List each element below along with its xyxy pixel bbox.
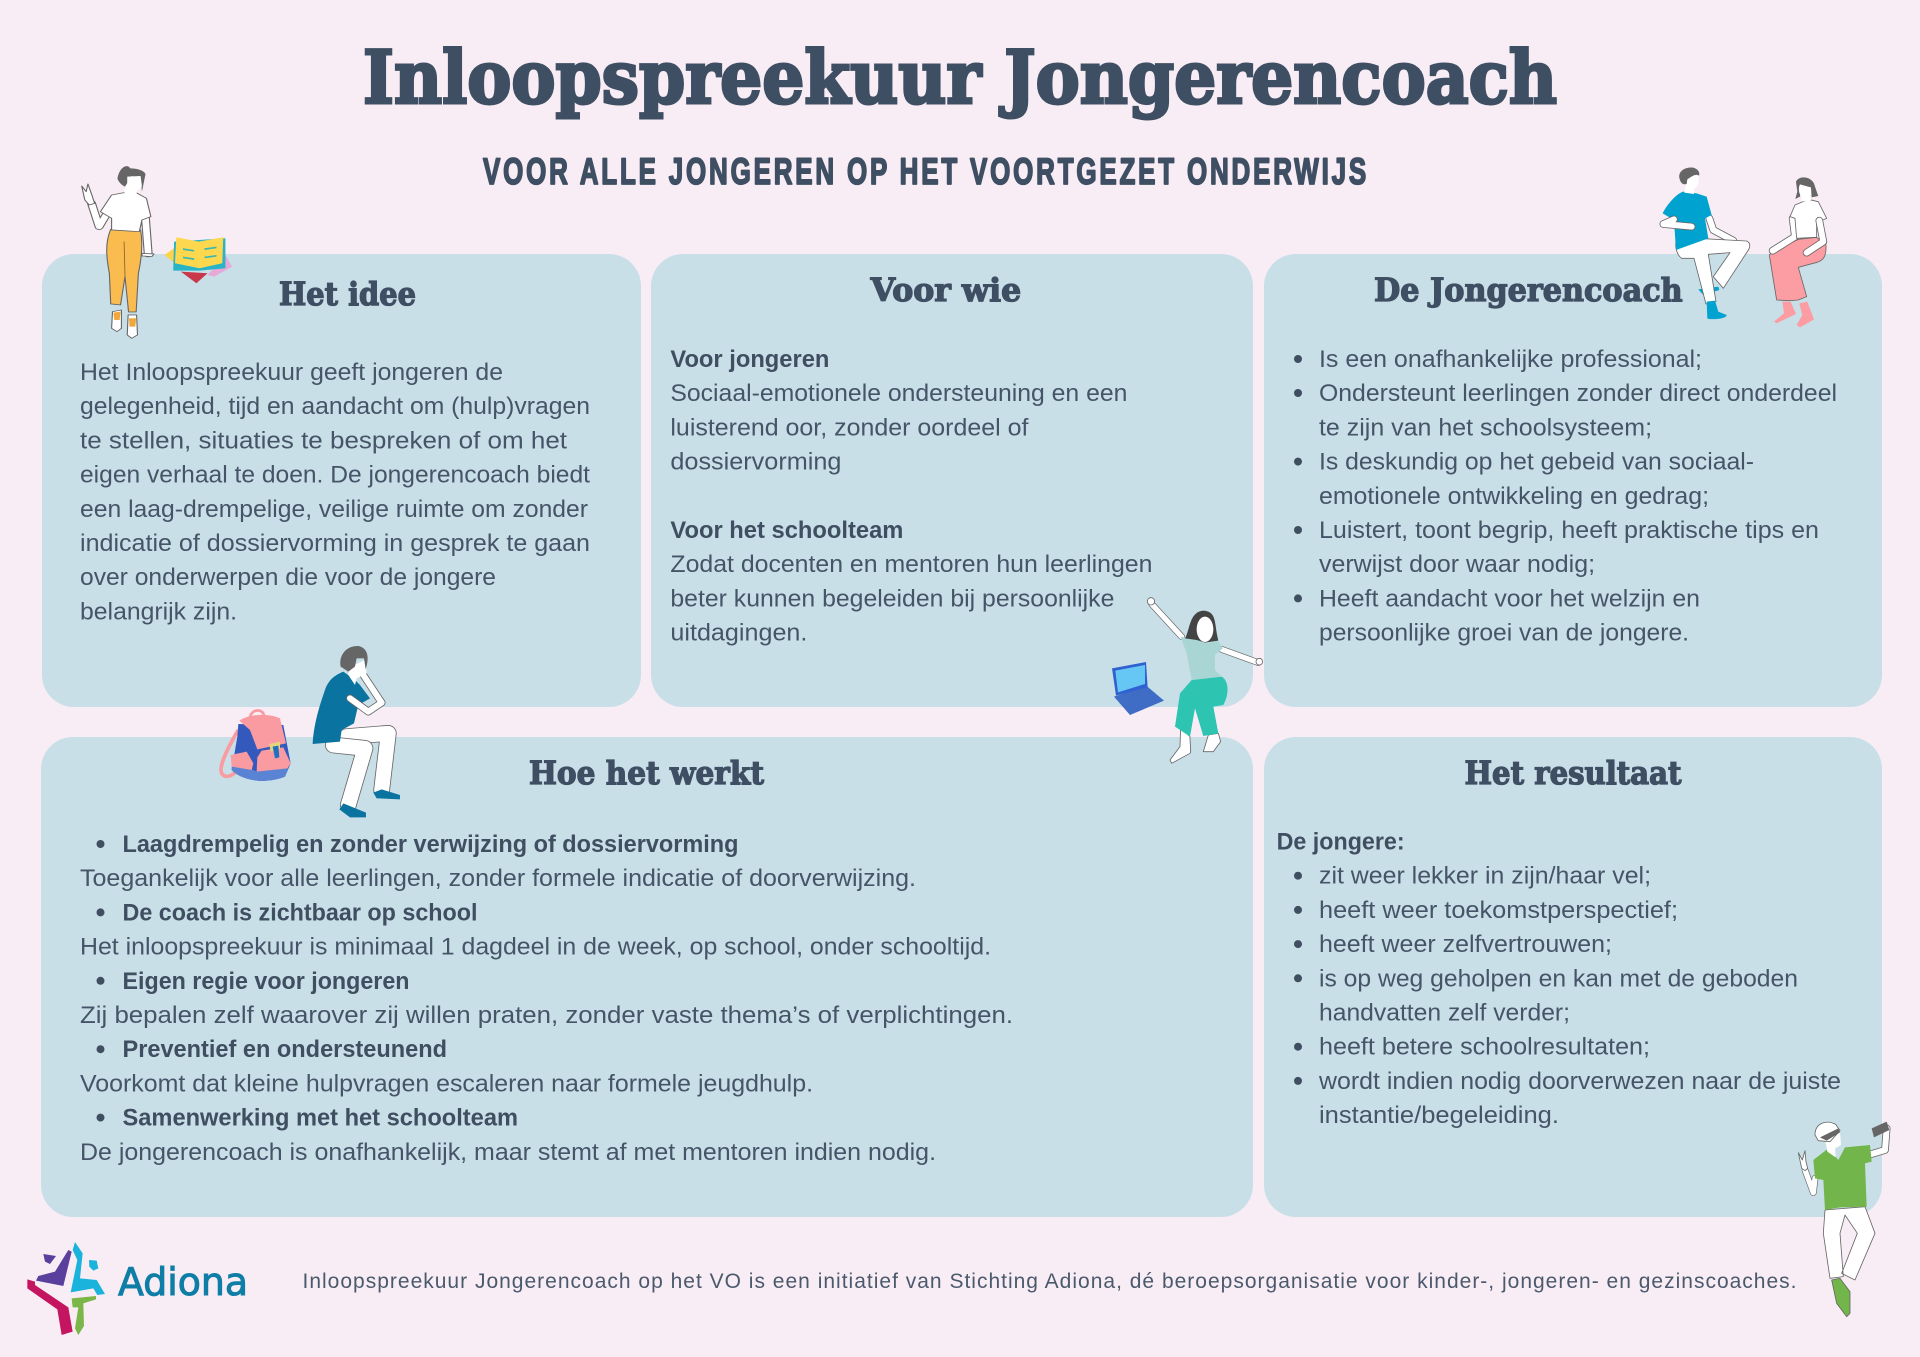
bullet list: het resultaat: wordt indien nodig doorverwezen naar de juiste [1318,1068,1841,1095]
bullet list: hoe het werkt: Zij bepalen zelf waarover zij willen praten, zonder vaste thema’s of verplichtingen. [80,1002,1013,1029]
bullet list: hoe het werkt: Eigen regie voor jongeren [122,968,410,995]
bullet list: het resultaat: handvatten zelf verder; [1319,1000,1570,1026]
bullet list: het resultaat: heeft weer zelfvertrouwen; [1319,931,1612,958]
bullet list: de jongerencoach: te zijn van het schoolsysteem; [1319,414,1652,441]
bullet list: het resultaat: heeft betere schoolresultaten; [1319,1034,1650,1061]
bullet list: het resultaat [1277,828,1841,1129]
text block: het idee: gelegenheid, tijd en aandacht om (hulp)vragen [80,393,590,420]
text block: voor wie: Voor jongeren [670,346,829,373]
text block: het idee: Het Inloopspreekuur geeft jongeren de [80,359,503,386]
heading: het idee: Het idee [279,275,416,313]
bullet list: het resultaat: instantie/begeleiding. [1319,1102,1559,1129]
bullet list: het resultaat: zit weer lekker in zijn/haar vel; [1319,863,1651,890]
icon: woman making peace sign [82,166,154,338]
logo: Adiona [27,1242,248,1335]
text block: voor wie: luisterend oor, zonder oordeel of [670,414,1029,441]
bullet list: de jongerencoach: emotionele ontwikkeling en gedrag; [1319,483,1709,510]
icon: seated boy in blue shirt [1663,168,1750,319]
text block: voor wie: dossiervorming [670,449,841,476]
text block: voor wie: uitdagingen. [670,620,807,647]
icon: seated girl in pink trousers [1769,177,1827,327]
text block: het idee: een laag-drempelige, veilige ruimte om zonder [80,496,588,523]
text block: voor wie [670,346,1152,647]
bullet list: hoe het werkt: De coach is zichtbaar op school [122,899,478,926]
panel: de jongerencoach [1264,254,1882,707]
bullet list: de jongerencoach: Luistert, toont begrip, heeft praktische tips en [1319,517,1819,544]
heading: voor wie: Voor wie [870,271,1021,309]
text block: voor wie: beter kunnen begeleiden bij persoonlijke [670,585,1114,612]
text block: het idee: belangrijk zijn. [80,598,237,625]
heading: hoe het werkt: Hoe het werkt [529,754,764,792]
heading: de jongerencoach: De Jongerencoach [1374,271,1683,309]
panel: hoe het werkt [41,737,1253,1217]
bullet list: hoe het werkt: Voorkomt dat kleine hulpvragen escaleren naar formele jeugdhulp. [80,1070,813,1097]
icon: dancing girl [1147,598,1263,763]
subtitle: VOOR ALLE JONGEREN OP HET VOORTGEZET ONDERWIJS [483,151,1369,192]
bullet list: hoe het werkt: Laagdrempelig en zonder verwijzing of dossiervorming [122,831,738,858]
bullet list: hoe het werkt: De jongerencoach is onafhankelijk, maar stemt af met mentoren indien nodig. [80,1139,936,1166]
bullet list: de jongerencoach: Heeft aandacht voor het welzijn en [1319,585,1700,612]
bullet list: hoe het werkt: Samenwerking met het schoolteam [122,1105,518,1132]
text block: voor wie: Voor het schoolteam [670,517,903,544]
panel: het resultaat [1264,737,1882,1217]
text block: het idee: eigen verhaal te doen. De jongerencoach biedt [80,462,590,489]
text block: het idee [80,359,590,625]
bullet list: het resultaat: is op weg geholpen en kan met de geboden [1319,965,1798,992]
icon: boy taking a selfie [1798,1122,1889,1317]
footer text: Inloopspreekuur Jongerencoach op het VO is een initiatief van Stichting Adiona, dé beroepsorganisatie voor kinder-, jongeren- en gezinscoaches. [302,1270,1797,1293]
bullet list: de jongerencoach: persoonlijke groei van de jongere. [1319,620,1689,647]
bullet list: hoe het werkt [80,831,1013,1166]
panel: voor wie [651,254,1253,707]
icon: laptop [1112,662,1164,715]
bullet list: de jongerencoach: verwijst door waar nodig; [1319,551,1595,578]
bullet list: de jongerencoach [1294,346,1837,647]
bullet list: het resultaat: De jongere: [1277,828,1405,856]
bullet list: het resultaat: heeft weer toekomstperspectief; [1319,897,1678,924]
bullet list: de jongerencoach: Is een onafhankelijke professional; [1319,346,1702,373]
bullet list: hoe het werkt: Preventief en ondersteunend [122,1036,447,1063]
bullet list: de jongerencoach: Ondersteunt leerlingen zonder direct onderdeel [1319,380,1837,407]
icon: backpack [221,710,291,781]
panel: het idee [42,254,641,707]
logo: Adiona: Adiona [118,1260,248,1304]
heading: het resultaat: Het resultaat [1464,754,1682,792]
text block: voor wie: Sociaal-emotionele ondersteuning en een [670,380,1127,407]
title: Inloopspreekuur Jongerencoach [363,35,1557,121]
text block: het idee: indicatie of dossiervorming in gesprek te gaan [80,530,590,557]
text block: het idee: over onderwerpen die voor de jongere [80,564,496,591]
bullet list: hoe het werkt: Toegankelijk voor alle leerlingen, zonder formele indicatie of doorverwijzing. [80,865,916,892]
text block: voor wie: Zodat docenten en mentoren hun leerlingen [670,551,1152,578]
bullet list: de jongerencoach: Is deskundig op het gebeid van sociaal- [1319,449,1754,476]
text block: het idee: te stellen, situaties te bespreken of om het [80,427,567,454]
icon: open book [164,237,232,283]
icon: thinking boy in blue shirt [313,646,400,817]
bullet list: hoe het werkt: Het inloopspreekuur is minimaal 1 dagdeel in de week, op school, onder schooltijd. [80,934,991,961]
